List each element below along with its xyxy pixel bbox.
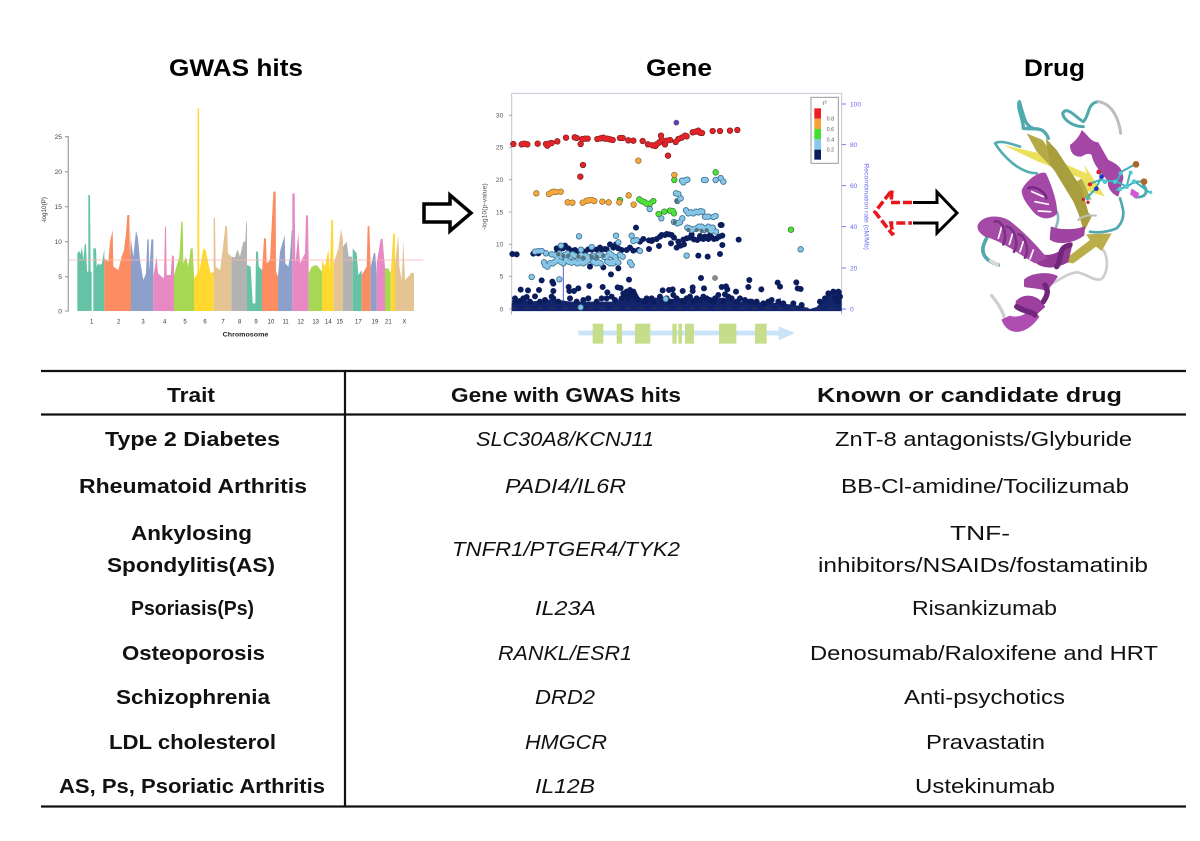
table header [167, 384, 1122, 407]
chart: Manhattan plot: 14 [325, 320, 332, 326]
chart: regional association plot: 20 [850, 265, 858, 272]
helix: centre [1022, 173, 1057, 218]
illustration: protein ribbon structure [977, 102, 1152, 331]
chart: Manhattan plot: 2 [117, 320, 121, 326]
chart: regional association plot: 60 [850, 183, 858, 190]
table column: drugs: Risankizumab [912, 597, 1057, 620]
table column: traits: Psoriasis(Ps) [131, 597, 254, 620]
chart: regional association plot: Recombination rate (cM/Mb) [862, 163, 869, 250]
table column: traits [59, 428, 325, 798]
arrow: drug to gene, dashed red [875, 190, 912, 235]
chart: Manhattan plot: 15 [55, 204, 62, 211]
table column: drugs: Denosumab/Raloxifene and HRT [810, 642, 1159, 665]
beta sheets [1003, 145, 1105, 197]
chart: Manhattan plot: 11 [283, 320, 289, 326]
chart: Manhattan plot: 0 [58, 308, 62, 315]
chart: regional association plot [482, 93, 869, 344]
chart: Manhattan plot: 21 [385, 320, 392, 326]
helix: left [977, 217, 1047, 263]
legend: r squared colour scale [811, 97, 838, 163]
chart: Manhattan plot: 3 [141, 320, 145, 326]
table column: traits: Type 2 Diabetes [105, 428, 280, 451]
table column: genes: HMGCR [525, 731, 607, 754]
table column: traits: AS, Ps, Psoriatic Arthritis [59, 775, 325, 798]
chart: regional association plot: 0 [850, 306, 854, 313]
heading: Gene: Gene [646, 55, 712, 82]
helix: lower long [1003, 312, 1038, 331]
legend: r squared colour scale: 0.4 [827, 137, 834, 143]
table column: drugs: ZnT-8 antagonists/Glyburide [835, 428, 1132, 451]
table column: drugs: Anti-psychotics [904, 686, 1065, 709]
table column: traits: Ankylosing [131, 522, 252, 545]
table column: genes: RANKL/ESR1 [498, 642, 632, 665]
table column: drugs: BB-Cl-amidine/Tocilizumab [841, 475, 1129, 498]
arrow: gene to drug [913, 192, 957, 233]
table column: drugs: Pravastatin [926, 731, 1045, 754]
chart: Manhattan plot: 6 [203, 320, 207, 326]
table header: Known or candidate drug [817, 384, 1122, 407]
table column: genes: TNFR1/PTGER4/TYK2 [452, 538, 681, 561]
chart: Manhattan plot: 7 [221, 320, 225, 326]
chart: regional association plot: 5 [500, 274, 504, 281]
legend: r squared colour scale: r² [823, 100, 827, 107]
table column: traits: Spondylitis(AS) [107, 554, 275, 577]
chart: regional association plot: 30 [496, 113, 504, 120]
chart: Manhattan plot: 13 [312, 320, 320, 326]
table column: genes: PADI4/IL6R [505, 475, 626, 498]
legend: r squared colour scale: 0.6 [827, 127, 834, 133]
chart: Manhattan plot: 1 [90, 320, 94, 326]
heading: GWAS hits: GWAS hits [169, 55, 303, 82]
table column: drugs [810, 428, 1159, 798]
chart: regional association plot: 100 [850, 101, 861, 108]
table column: drugs: TNF- [950, 522, 1010, 545]
chart: Manhattan plot: 12 [297, 320, 305, 326]
chart: regional association plot: 0 [500, 306, 504, 313]
chart: regional association plot: 25 [496, 145, 504, 152]
table column: genes [452, 428, 681, 798]
chart: regional association plot: -log10(p-value) [482, 183, 489, 230]
table column: genes: DRD2 [535, 686, 596, 709]
table column: drugs: inhibitors/NSAIDs/fostamatinib [818, 554, 1148, 577]
chart: regional association plot: 40 [850, 224, 858, 231]
chart: Manhattan plot: 20 [55, 169, 62, 176]
legend: r squared colour scale: 0.2 [827, 147, 834, 153]
chart: Manhattan plot: 25 [55, 134, 62, 141]
chart: Manhattan plot: 5 [58, 274, 62, 281]
chart: regional association plot: 10 [496, 242, 504, 249]
table column: traits: Osteoporosis [122, 642, 265, 665]
arrow: GWAS hits to gene [424, 195, 471, 231]
table column: genes: IL12B [535, 775, 595, 798]
legend: r squared colour scale: 0.8 [827, 117, 834, 123]
table header: Gene with GWAS hits [451, 384, 681, 407]
chart: Manhattan plot: 5 [183, 320, 187, 326]
chart: Manhattan plot: 4 [163, 320, 167, 326]
chart: Manhattan plot: 19 [372, 320, 379, 326]
chart: Manhattan plot: 8 [238, 320, 242, 326]
chart: Manhattan plot: 9 [254, 320, 258, 326]
chart: Manhattan plot: -log10(P) [41, 197, 48, 223]
heading: Drug: Drug [1024, 55, 1085, 82]
loops [983, 220, 998, 265]
ligand [1082, 161, 1152, 204]
chart: Manhattan plot: X [402, 320, 406, 326]
table column: drugs: Ustekinumab [915, 775, 1055, 798]
table column: genes: IL23A [535, 597, 596, 620]
table column: traits: Schizophrenia [116, 686, 271, 709]
chart: regional association plot: 80 [850, 142, 858, 149]
chart: Manhattan plot: 15 [336, 320, 344, 326]
chart: regional association plot: 20 [496, 177, 504, 184]
table column: traits: LDL cholesterol [109, 731, 276, 754]
table column: genes: SLC30A8/KCNJ11 [476, 428, 654, 451]
helix: upper [1070, 130, 1123, 197]
chart: Manhattan plot: 10 [55, 239, 62, 246]
chart: Manhattan plot: 10 [268, 320, 275, 326]
chart: regional association plot: 15 [496, 209, 504, 216]
table header: Trait [167, 384, 215, 407]
table rules [41, 371, 1186, 806]
chart: Manhattan plot: 17 [355, 320, 362, 326]
chart: Manhattan plot [41, 108, 423, 338]
chart: Manhattan plot: Chromosome [223, 331, 269, 338]
table column: traits: Rheumatoid Arthritis [79, 475, 307, 498]
gene track [578, 324, 795, 344]
